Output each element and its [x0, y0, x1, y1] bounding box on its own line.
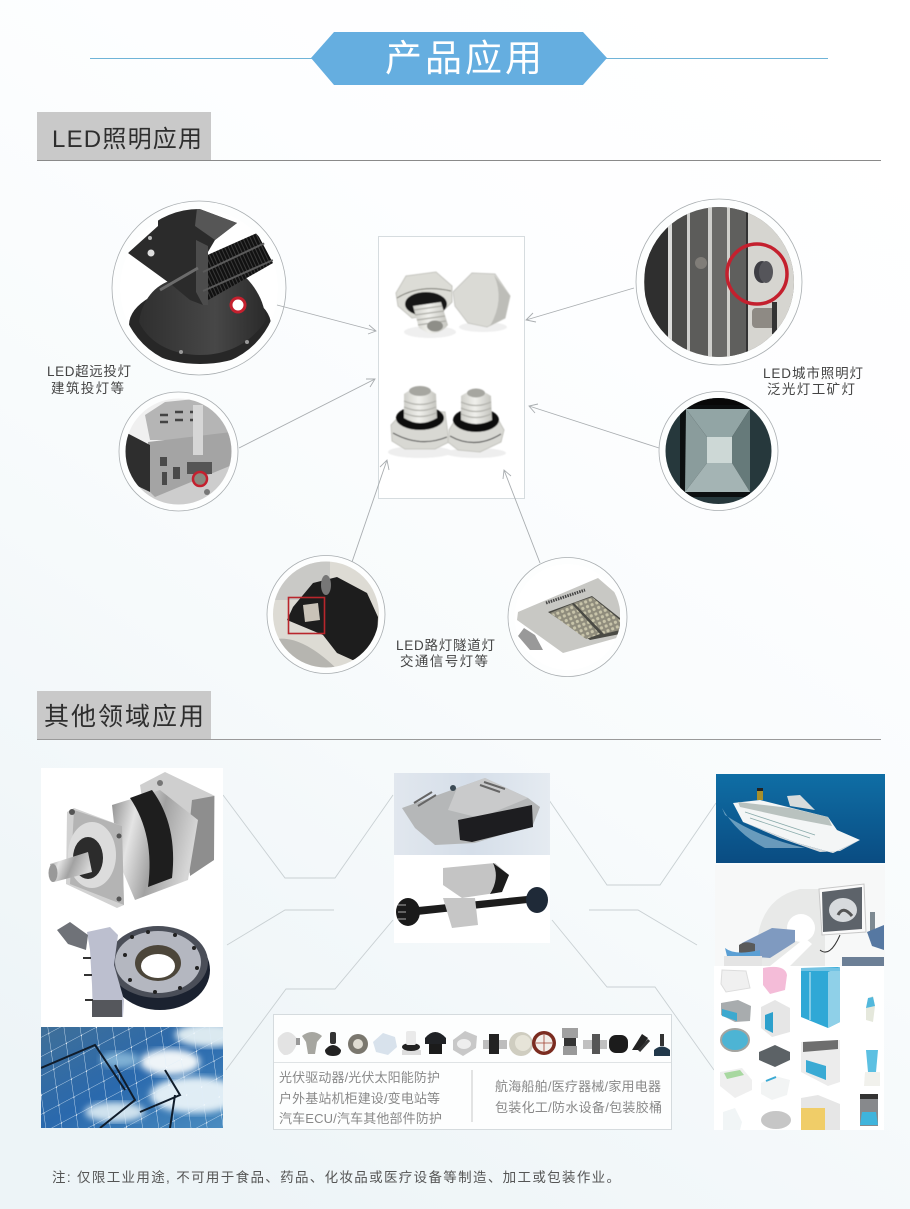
- label: city lighting: 泛光灯工矿灯: [767, 382, 855, 397]
- title banner: 产品应用: [385, 38, 542, 79]
- heading: other applications: 其他领域应用: [44, 703, 204, 731]
- circle photo: high bay lamp: [112, 201, 286, 375]
- arrow: high bay lamp to plug: [277, 305, 376, 334]
- application list left: 光伏驱动器/光伏太阳能防护: [279, 1070, 440, 1085]
- application list right: [495, 1079, 662, 1115]
- label: street and tunnel lights: [396, 638, 495, 669]
- photo: cruise ship: [716, 774, 885, 863]
- photo: planetary gearbox: [48, 772, 215, 908]
- panel: product range and applications: [274, 1014, 672, 1130]
- red marker: [193, 472, 207, 486]
- footnote: 注: 仅限工业用途, 不可用于食品、药品、化妆品或医疗设备等制造、加工或包装作业。: [52, 1169, 620, 1185]
- application list left: 户外基站机柜建设/变电站等: [279, 1091, 440, 1106]
- vent cap top right: [453, 273, 510, 332]
- heading: other applications: [37, 691, 881, 740]
- photo column: right: [714, 774, 885, 1130]
- photo: home appliances: [714, 966, 884, 1130]
- label: street and tunnel lights: 交通信号灯等: [400, 653, 488, 669]
- application list right: 航海船舶/医疗器械/家用电器: [495, 1079, 661, 1094]
- label: high bay lamps: 建筑投灯等: [51, 380, 124, 396]
- photo: slewing drive: [57, 922, 210, 1017]
- photo column: middle: [394, 773, 550, 943]
- arrow: flood light to plug: [529, 404, 659, 448]
- application list right: 包装化工/防水设备/包装胶桶: [495, 1100, 662, 1115]
- photo: ECU: [394, 773, 550, 855]
- red marker: [231, 298, 245, 312]
- circle photo: lamp driver housing: [119, 392, 238, 511]
- red marker box: [288, 598, 324, 634]
- connector lines: [223, 795, 716, 1070]
- heading: LED lighting applications: LED照明应用: [52, 126, 202, 153]
- vent plug bottom left: [388, 386, 452, 458]
- circle photo: street light: [508, 558, 627, 676]
- circle photo: tunnel light: [267, 556, 385, 674]
- application list left: [279, 1070, 442, 1126]
- vent plug top left: [396, 272, 456, 338]
- label: high bay lamps: [47, 364, 131, 396]
- panel: central vent plug photo: [378, 236, 524, 498]
- arrow: city light to plug: [526, 288, 634, 322]
- application list left: 汽车ECU/汽车其他部件防护: [279, 1111, 442, 1126]
- photo: electric axle: [394, 855, 550, 943]
- arrow: tunnel light to plug: [352, 460, 389, 562]
- product thumbnails row: [278, 1028, 670, 1056]
- label: street and tunnel lights: LED路灯隧道灯: [396, 638, 495, 653]
- arrow: driver housing to plug: [239, 379, 375, 448]
- title banner: [90, 32, 828, 85]
- photo: solar panels: [41, 1027, 223, 1128]
- label: high bay lamps: LED超远投灯: [47, 364, 131, 379]
- heading: LED lighting applications: [37, 112, 881, 160]
- circle photo: flood light: [659, 392, 778, 510]
- photo column: left: [41, 768, 223, 1128]
- vent plug bottom right: [446, 388, 506, 458]
- circle photo: city lighting fixture: [636, 199, 802, 365]
- label: city lighting: LED城市照明灯: [763, 365, 863, 381]
- photo: CT scanner: [715, 865, 885, 966]
- red marker: [727, 244, 787, 304]
- label: city lighting: [763, 365, 863, 397]
- arrow: street light to plug: [503, 470, 540, 563]
